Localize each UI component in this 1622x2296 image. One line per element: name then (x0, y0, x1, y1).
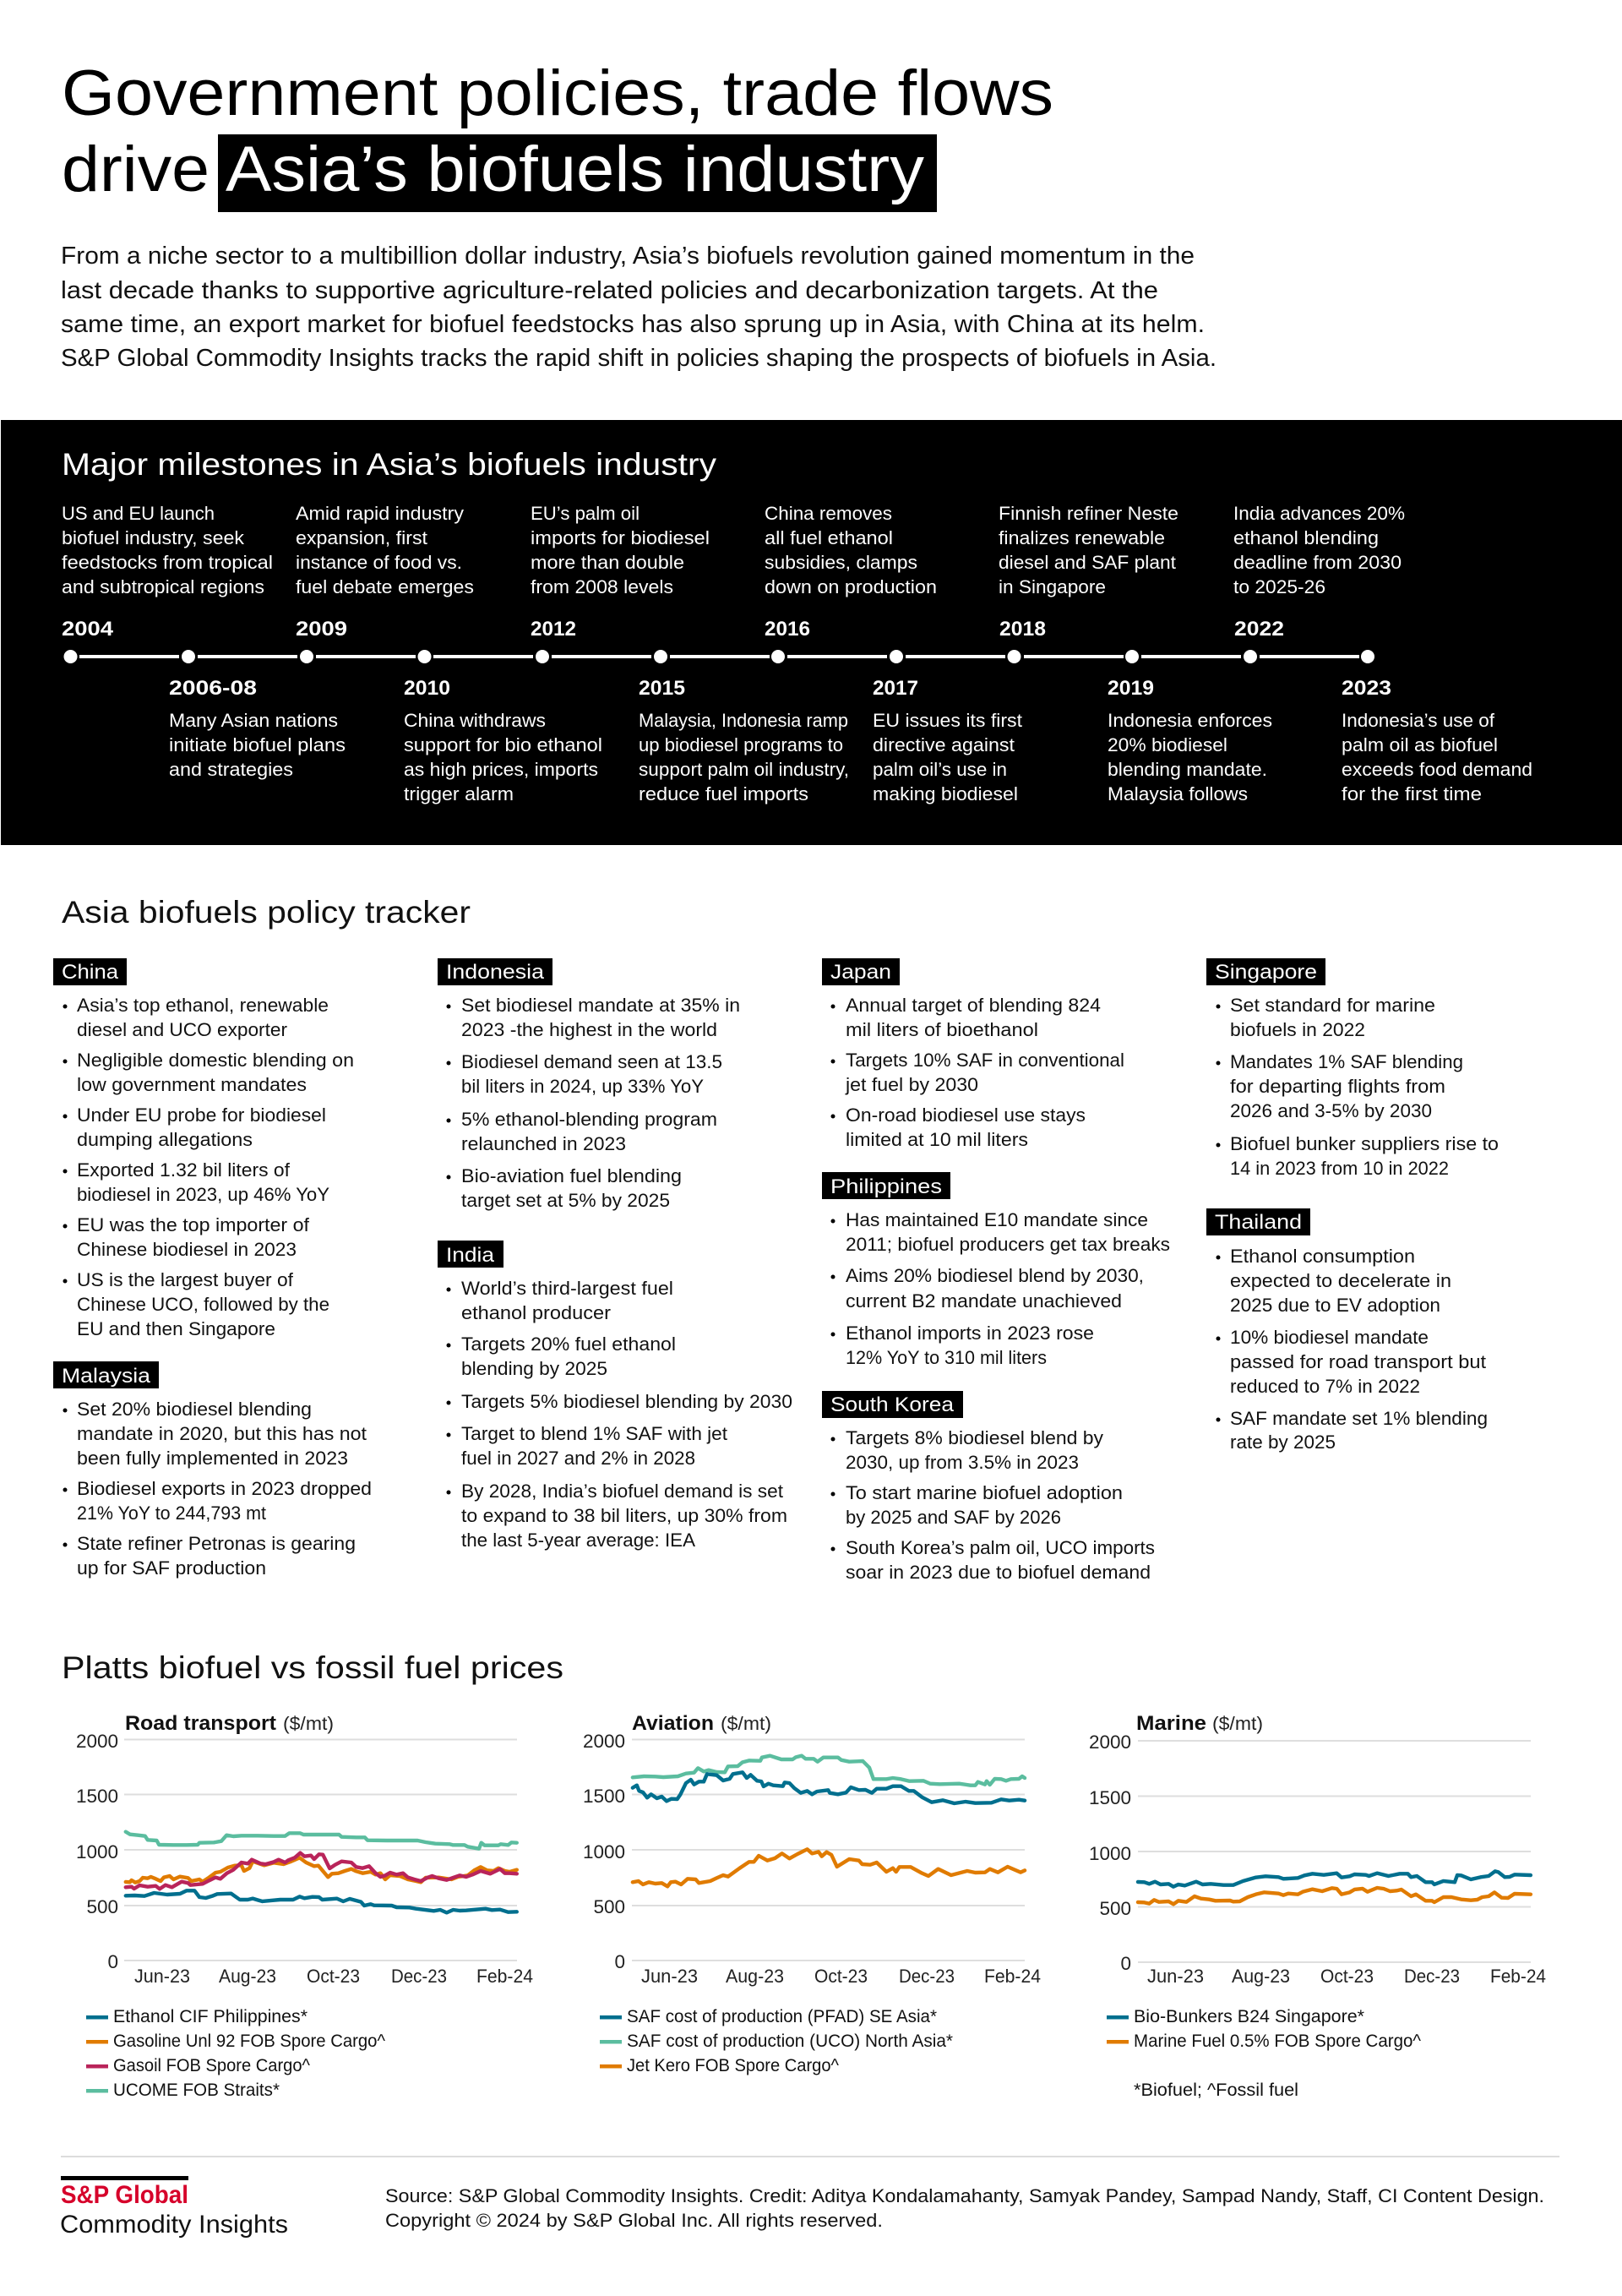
marine chart title: ($/mt) (1212, 1713, 1263, 1734)
chart: road transport: 500 (86, 1896, 118, 1917)
prices section heading: Platts biofuel vs fossil fuel prices (62, 1650, 563, 1685)
aviation legend: SAF cost of production (PFAD) SE Asia* (627, 2007, 937, 2026)
chart: road transport: 0 (107, 1951, 118, 1972)
chart: marine: 2000 (1089, 1732, 1131, 1753)
milestone 2022 (1233, 503, 1405, 641)
milestone 2022: India advances 20% (1233, 503, 1405, 524)
milestone 2016: 2016 (765, 618, 810, 641)
milestone 2004 (62, 503, 273, 641)
milestone 2019: 2019 (1108, 677, 1154, 700)
marine price lines (1138, 1871, 1531, 1904)
milestone 2018: finalizes renewable (999, 527, 1165, 548)
milestones heading: Major milestones in Asia’s biofuels industry (62, 447, 717, 482)
milestone 2009: 2009 (296, 618, 347, 641)
policy: Thailand: 2025 due to EV adoption (1230, 1295, 1440, 1316)
policy: Indonesia: 2023 -the highest in the world (461, 1019, 717, 1040)
policy: Indonesia: Set biodiesel mandate at 35% in (461, 995, 740, 1016)
milestone 2009 (296, 503, 474, 641)
policy: Malaysia: State refiner Petronas is gearing (77, 1533, 356, 1554)
milestone 2006-08: and strategies (169, 759, 293, 780)
policy: South Korea: by 2025 and SAF by 2026 (846, 1507, 1061, 1528)
policy: South Korea: Targets 8% biodiesel blend by (846, 1427, 1104, 1448)
policy: Japan: mil liters of bioethanol (846, 1019, 1038, 1040)
milestone 2004: and subtropical regions (62, 576, 264, 597)
policy: Thailand: passed for road transport but (1230, 1351, 1487, 1372)
milestone 2017: EU issues its first (873, 710, 1023, 731)
panel: major milestones timeline (1, 420, 1622, 845)
policy: India: Targets 5% biodiesel blending by 2030 (461, 1391, 792, 1412)
milestone 2012: 2012 (531, 618, 576, 641)
policy: China: diesel and UCO exporter (77, 1019, 288, 1040)
policy: Indonesia: Biodiesel demand seen at 13.5 (461, 1051, 722, 1072)
intro paragraph (61, 243, 1216, 372)
policy: Thailand: reduced to 7% in 2022 (1230, 1376, 1420, 1397)
milestone 2023: 2023 (1342, 677, 1391, 700)
policy: South Korea: South Korea (830, 1393, 954, 1416)
milestone 2012: more than double (531, 552, 684, 573)
policy: China: EU was the top importer of (77, 1214, 310, 1235)
milestone 2004: US and EU launch (62, 503, 215, 524)
intro paragraph: same time, an export market for biofuel feedstocks has also sprung up in Asia, with China at its helm. (61, 311, 1205, 338)
policy: Malaysia: Biodiesel exports in 2023 dropped (77, 1478, 372, 1499)
marine chart title: Marine (1136, 1712, 1206, 1735)
milestone 2010 (404, 677, 602, 804)
policy: Singapore: Singapore (1215, 961, 1317, 984)
policy: Japan: limited at 10 mil liters (846, 1129, 1028, 1150)
milestone 2012: EU’s palm oil (531, 503, 640, 524)
milestone 2009: instance of food vs. (296, 552, 462, 573)
policy: China: China (62, 961, 118, 984)
milestone 2019: 20% biodiesel (1108, 734, 1227, 755)
chart: aviation: 1500 (583, 1786, 625, 1807)
road transport price lines (126, 1832, 517, 1912)
milestone 2015: up biodiesel programs to (639, 734, 843, 755)
milestone 2004: feedstocks from tropical (62, 552, 273, 573)
milestone 2019 (1108, 677, 1272, 804)
policy: Indonesia: relaunched in 2023 (461, 1133, 626, 1154)
chart: marine: Jun-23 (1147, 1966, 1204, 1987)
policy: China: biodiesel in 2023, up 46% YoY (77, 1184, 329, 1205)
policy: India: to expand to 38 bil liters, up 30% from (461, 1505, 787, 1526)
policy: China: Chinese UCO, followed by the (77, 1294, 329, 1315)
policy: India: Target to blend 1% SAF with jet (461, 1423, 728, 1444)
milestone 2018: Finnish refiner Neste (999, 503, 1178, 524)
marine legend: Bio-Bunkers B24 Singapore* (1134, 2007, 1364, 2026)
marine legend (1107, 2007, 1421, 2051)
policy: Indonesia: Bio-aviation fuel blending (461, 1165, 682, 1186)
milestone 2017: making biodiesel (873, 783, 1018, 804)
chart: road transport: Oct-23 (307, 1966, 360, 1987)
road transport chart title: Road transport (125, 1712, 276, 1735)
policy: Indonesia: Indonesia (446, 961, 544, 984)
chart: aviation: 500 (593, 1896, 625, 1917)
policy: Singapore: biofuels in 2022 (1230, 1019, 1365, 1040)
policy: Singapore: 2026 and 3-5% by 2030 (1230, 1100, 1432, 1121)
chart: aviation: Dec-23 (899, 1966, 955, 1987)
policy tracker heading: Asia biofuels policy tracker (62, 895, 471, 930)
marine legend: Marine Fuel 0.5% FOB Spore Cargo^ (1134, 2031, 1421, 2051)
policy: Malaysia: been fully implemented in 2023 (77, 1448, 348, 1469)
chart: road transport (76, 1712, 533, 2100)
milestone 2017 (873, 677, 1023, 804)
policy: India: blending by 2025 (461, 1358, 607, 1379)
policy: Thailand: 10% biodiesel mandate (1230, 1327, 1429, 1348)
milestone 2006-08: Many Asian nations (169, 710, 338, 731)
chart: aviation: Jun-23 (641, 1966, 698, 1987)
milestone 2016 (765, 503, 937, 641)
milestone 2009: expansion, first (296, 527, 428, 548)
milestone 2006-08: 2006-08 (169, 677, 257, 700)
policy: Philippines: current B2 mandate unachieved (846, 1290, 1122, 1312)
policy: India: ethanol producer (461, 1302, 612, 1323)
footnote: biofuel and fossil fuel markers: *Biofuel; ^Fossil fuel (1134, 2081, 1298, 2100)
milestone 2022: deadline from 2030 (1233, 552, 1402, 573)
aviation legend: SAF cost of production (UCO) North Asia* (627, 2031, 953, 2051)
policy: Indonesia: 5% ethanol-blending program (461, 1109, 717, 1130)
milestone 2016: all fuel ethanol (765, 527, 893, 548)
road transport legend (86, 2007, 385, 2100)
policy: Singapore: Set standard for marine (1230, 995, 1435, 1016)
panel: policy tracker (53, 895, 1499, 1583)
chart: marine: 0 (1120, 1953, 1131, 1974)
milestone 2010: 2010 (404, 677, 450, 700)
policy: Japan: Japan (830, 961, 891, 984)
policy: China: Under EU probe for biodiesel (77, 1104, 326, 1126)
policy: Singapore (1206, 958, 1499, 1179)
policy: China: Exported 1.32 bil liters of (77, 1159, 291, 1181)
milestone 2017: palm oil’s use in (873, 759, 1007, 780)
milestone 2017: 2017 (873, 677, 918, 700)
aviation price lines (633, 1756, 1025, 1886)
road transport legend: Gasoil FOB Spore Cargo^ (113, 2056, 310, 2075)
policy: Japan: On-road biodiesel use stays (846, 1104, 1086, 1126)
title: Government policies, trade flows (62, 57, 1053, 129)
road transport chart title: ($/mt) (283, 1713, 334, 1734)
policy: Indonesia: bil liters in 2024, up 33% YoY (461, 1076, 704, 1097)
policy: Thailand (1206, 1208, 1488, 1453)
policy: Thailand: SAF mandate set 1% blending (1230, 1408, 1488, 1429)
marine chart title (1136, 1712, 1263, 1735)
chart: aviation: 1000 (583, 1841, 625, 1862)
milestone 2010: support for bio ethanol (404, 734, 602, 755)
chart: road transport: Dec-23 (391, 1966, 447, 1987)
policy: Singapore: Mandates 1% SAF blending (1230, 1051, 1463, 1072)
chart: aviation: Feb-24 (984, 1966, 1041, 1987)
policy: Philippines: Philippines (830, 1175, 942, 1198)
policy: India: World’s third-largest fuel (461, 1278, 673, 1299)
policy: Thailand: Thailand (1215, 1211, 1302, 1234)
policy: Japan (822, 958, 1124, 1150)
milestone 2012: imports for biodiesel (531, 527, 710, 548)
chart: marine: 1000 (1089, 1843, 1131, 1864)
chart: road transport: 1000 (76, 1841, 118, 1862)
chart: marine: Feb-24 (1490, 1966, 1546, 1987)
policy: India: the last 5-year average: IEA (461, 1530, 695, 1551)
milestone 2019: Malaysia follows (1108, 783, 1248, 804)
policy: Malaysia: up for SAF production (77, 1557, 266, 1579)
milestone 2016: China removes (765, 503, 892, 524)
policy: India: India (446, 1244, 494, 1267)
chart: road transport: 2000 (76, 1731, 118, 1752)
road transport legend: Gasoline Unl 92 FOB Spore Cargo^ (113, 2031, 385, 2051)
aviation chart title: Aviation (632, 1712, 714, 1735)
timeline line with dots (64, 650, 1374, 663)
milestone 2006-08: initiate biofuel plans (169, 734, 346, 755)
policy: South Korea: To start marine biofuel adoption (846, 1482, 1123, 1503)
milestone 2004: biofuel industry, seek (62, 527, 245, 548)
milestone 2023: Indonesia’s use of (1342, 710, 1495, 731)
policy: South Korea: 2030, up from 3.5% in 2023 (846, 1452, 1079, 1473)
policy: Philippines: Ethanol imports in 2023 rose (846, 1323, 1094, 1344)
policy: Indonesia: target set at 5% by 2025 (461, 1190, 670, 1211)
policy: Malaysia: Malaysia (62, 1365, 150, 1388)
milestone 2018: in Singapore (999, 576, 1106, 597)
chart: marine: 500 (1099, 1898, 1131, 1919)
milestone 2010: China withdraws (404, 710, 546, 731)
policy: South Korea: soar in 2023 due to biofuel demand (846, 1562, 1151, 1583)
policy: Japan: Targets 10% SAF in conventional (846, 1050, 1124, 1071)
policy: India: Targets 20% fuel ethanol (461, 1333, 676, 1355)
logo: S&P Global Commodity Insights (60, 2176, 288, 2239)
milestone 2015: 2015 (639, 677, 685, 700)
chart: aviation (583, 1712, 1041, 2075)
policy: Indonesia (438, 958, 740, 1211)
chart: marine: Oct-23 (1320, 1966, 1374, 1987)
aviation chart title (632, 1712, 771, 1735)
milestone 2018: diesel and SAF plant (999, 552, 1177, 573)
policy: Malaysia: mandate in 2020, but this has not (77, 1423, 367, 1444)
source and copyright: Copyright © 2024 by S&P Global Inc. All rights reserved. (385, 2210, 883, 2231)
policy: Philippines: 12% YoY to 310 mil liters (846, 1347, 1047, 1368)
milestone 2023: for the first time (1342, 783, 1482, 804)
policy: Japan: Annual target of blending 824 (846, 995, 1101, 1016)
milestone 2015: support palm oil industry, (639, 759, 849, 780)
policy: Philippines: Has maintained E10 mandate since (846, 1209, 1148, 1230)
chart: marine: Aug-23 (1232, 1966, 1290, 1987)
policy: China (53, 958, 354, 1339)
milestone 2006-08 (169, 677, 346, 780)
policy: South Korea: South Korea’s palm oil, UCO imports (846, 1537, 1155, 1558)
chart: aviation: Oct-23 (814, 1966, 868, 1987)
chart: aviation: 0 (614, 1951, 625, 1972)
milestone 2012: from 2008 levels (531, 576, 673, 597)
logo: S&P Global Commodity Insights: Commodity Insights (60, 2211, 288, 2239)
policy: China: US is the largest buyer of (77, 1269, 294, 1290)
road transport legend: Ethanol CIF Philippines* (113, 2007, 308, 2026)
milestone 2012 (531, 503, 710, 641)
milestone 2009: fuel debate emerges (296, 576, 474, 597)
chart: aviation: Aug-23 (726, 1966, 784, 1987)
milestone 2015: Malaysia, Indonesia ramp (639, 710, 848, 731)
chart: marine: 1500 (1089, 1787, 1131, 1808)
policy: Singapore: 14 in 2023 from 10 in 2022 (1230, 1158, 1449, 1179)
policy: China: Asia’s top ethanol, renewable (77, 995, 329, 1016)
policy: China: dumping allegations (77, 1129, 253, 1150)
source and copyright (385, 2185, 1544, 2231)
milestone 2023 (1342, 677, 1532, 804)
milestone 2010: trigger alarm (404, 783, 514, 804)
milestone 2018: 2018 (999, 618, 1046, 641)
milestone 2015: reduce fuel imports (639, 783, 808, 804)
policy: Thailand: expected to decelerate in (1230, 1270, 1451, 1291)
chart: road transport: 1500 (76, 1786, 118, 1807)
milestone 2018 (999, 503, 1178, 641)
title (62, 57, 1053, 212)
milestone 2019: blending mandate. (1108, 759, 1267, 780)
milestone 2015 (639, 677, 849, 804)
milestone 2016: down on production (765, 576, 937, 597)
logo: S&P Global Commodity Insights: S&P Global (61, 2181, 188, 2209)
policy: India: fuel in 2027 and 2% in 2028 (461, 1448, 695, 1469)
policy: Thailand: Ethanol consumption (1230, 1246, 1415, 1267)
milestone 2004: 2004 (62, 618, 113, 641)
policy: Malaysia (53, 1361, 372, 1579)
policy: Malaysia: 21% YoY to 244,793 mt (77, 1502, 267, 1524)
policy: Thailand: rate by 2025 (1230, 1432, 1336, 1453)
policy: India (438, 1241, 792, 1551)
intro paragraph: From a niche sector to a multibillion dollar industry, Asia’s biofuels revolution gained momentum in the (61, 243, 1195, 270)
milestone 2022: 2022 (1234, 618, 1284, 641)
chart: marine: Dec-23 (1404, 1966, 1460, 1987)
road transport legend: UCOME FOB Straits* (113, 2081, 280, 2100)
chart: marine (1089, 1712, 1546, 2051)
aviation legend (600, 2007, 953, 2075)
aviation legend: Jet Kero FOB Spore Cargo^ (627, 2056, 839, 2075)
milestone 2017: directive against (873, 734, 1015, 755)
policy: Singapore: Biofuel bunker suppliers rise to (1230, 1133, 1499, 1154)
policy: Philippines: Aims 20% biodiesel blend by 2030, (846, 1265, 1144, 1286)
policy: Japan: jet fuel by 2030 (845, 1074, 978, 1095)
title: drive (62, 134, 210, 205)
policy: India: By 2028, India’s biofuel demand is set (461, 1481, 784, 1502)
chart: aviation: 2000 (583, 1731, 625, 1752)
intro paragraph: last decade thanks to supportive agriculture-related policies and decarbonization targets. At the (61, 277, 1158, 304)
milestone 2023: exceeds food demand (1342, 759, 1532, 780)
milestone 2009: Amid rapid industry (296, 503, 465, 524)
policy: South Korea (822, 1391, 1155, 1583)
milestone 2019: Indonesia enforces (1108, 710, 1272, 731)
milestone 2022: ethanol blending (1233, 527, 1379, 548)
policy: Philippines: 2011; biofuel producers get tax breaks (846, 1234, 1170, 1255)
milestone 2010: as high prices, imports (404, 759, 598, 780)
intro paragraph: S&P Global Commodity Insights tracks the rapid shift in policies shaping the prospects of biofuels in Asia. (61, 345, 1216, 372)
milestone 2016: subsidies, clamps (765, 552, 917, 573)
chart: road transport: Feb-24 (476, 1966, 533, 1987)
chart: road transport: Jun-23 (134, 1966, 190, 1987)
policy: Malaysia: Set 20% biodiesel blending (77, 1399, 312, 1420)
milestone 2022: to 2025-26 (1233, 576, 1325, 597)
source and copyright: Source: S&P Global Commodity Insights. Credit: Aditya Kondalamahanty, Samyak Pandey, Sampad Nandy, Staff, CI Content Design. (385, 2185, 1544, 2206)
policy: Singapore: for departing flights from (1230, 1076, 1445, 1097)
chart: road transport: Aug-23 (219, 1966, 276, 1987)
aviation chart title: ($/mt) (721, 1713, 771, 1734)
policy: China: Negligible domestic blending on (77, 1050, 354, 1071)
title: Asia’s biofuels industry (226, 134, 924, 205)
policy: China: Chinese biodiesel in 2023 (77, 1239, 297, 1260)
policy: Philippines (822, 1172, 1170, 1368)
policy: China: low government mandates (77, 1074, 307, 1095)
milestone 2023: palm oil as biofuel (1342, 734, 1498, 755)
policy: China: EU and then Singapore (77, 1318, 275, 1339)
